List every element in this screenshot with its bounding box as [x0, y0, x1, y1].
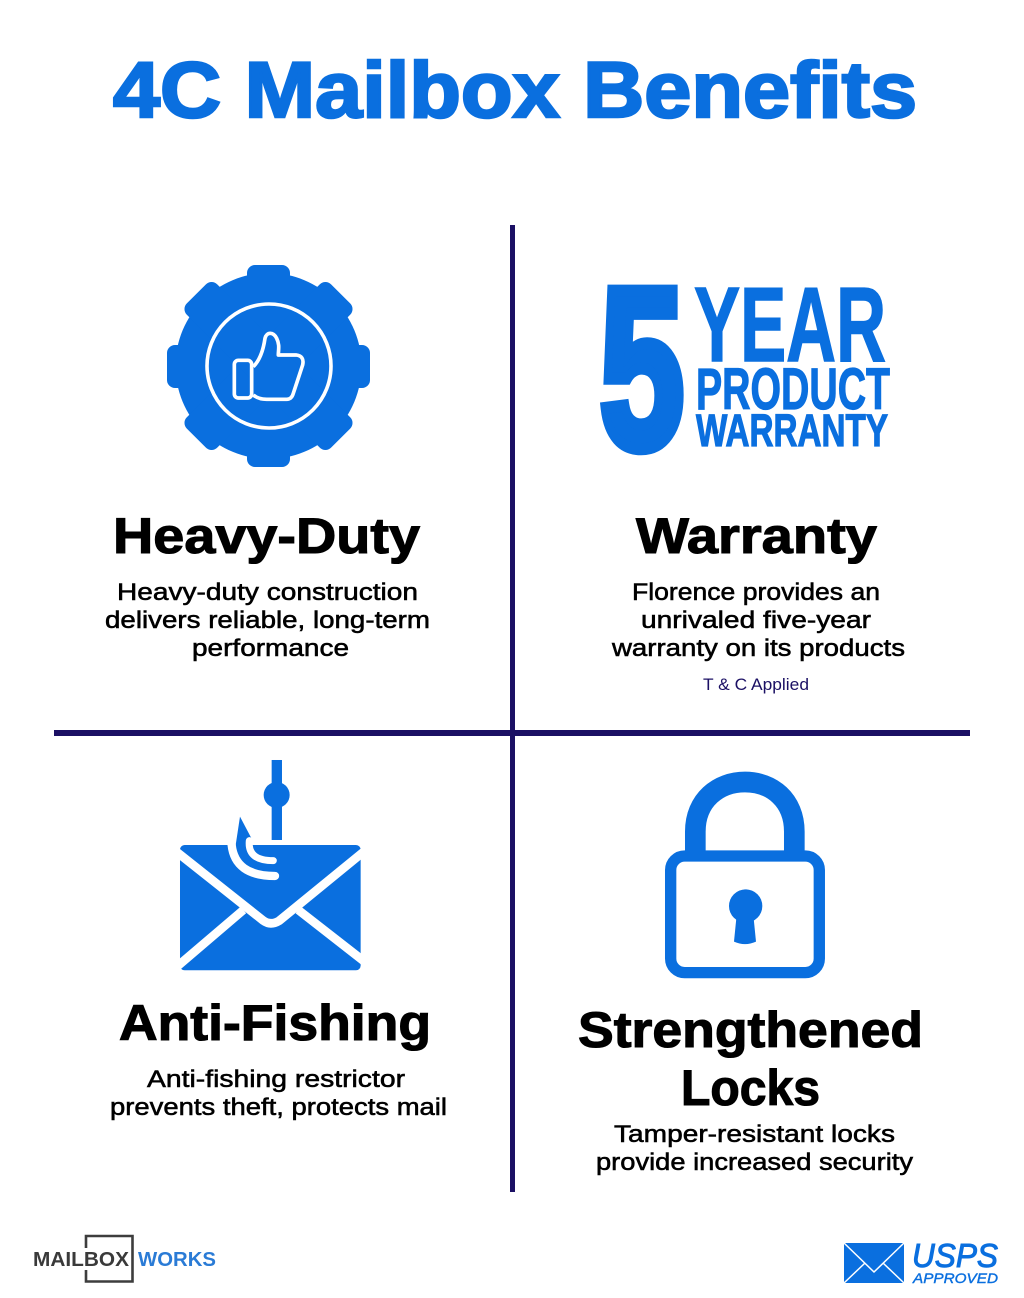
panel: warranty [600, 241, 905, 694]
panel: heavy-duty [105, 265, 430, 662]
logo: USPS Approved: USPS [912, 1237, 998, 1274]
body text: heavy-duty: delivers reliable, long-term [105, 607, 430, 634]
icon: 5 year product warranty badge: PRODUCT [696, 357, 890, 422]
icon: 5 year product warranty badge: YEAR [694, 266, 886, 384]
heading: Anti-Fishing: Anti-Fishing [119, 995, 431, 1051]
body text: heavy-duty [105, 579, 430, 662]
icon: padlock [671, 782, 819, 973]
grid divider: vertical [510, 225, 515, 1192]
logo: USPS Approved [844, 1237, 998, 1286]
body text: anti-fishing [110, 1066, 447, 1121]
heading: Strengthened Locks: Strengthened [578, 1002, 923, 1058]
icon: 5 year product warranty badge [600, 241, 890, 495]
logo: USPS Approved: APPROVED [912, 1270, 998, 1286]
heading: Heavy-Duty: Heavy-Duty [113, 508, 420, 564]
grid divider: horizontal [54, 730, 970, 736]
icon: 5 year product warranty badge: 5 [600, 241, 684, 495]
body text: warranty: Florence provides an [632, 579, 880, 606]
body text: heavy-duty: Heavy-duty construction [117, 579, 418, 606]
body text: warranty: unrivaled five-year [641, 607, 871, 634]
icon: envelope with fishing hook [173, 760, 367, 970]
body text: anti-fishing: prevents theft, protects mail [110, 1094, 447, 1121]
panel: anti-fishing [110, 760, 447, 1121]
heading: Strengthened Locks: Locks [681, 1060, 820, 1116]
logo: Mailbox Works: MAILBOX [33, 1249, 130, 1271]
note: terms and conditions: T & C Applied [703, 676, 809, 694]
icon: gear with thumbs up [167, 265, 370, 467]
body text: locks [596, 1121, 913, 1176]
logo: Mailbox Works [33, 1236, 216, 1282]
heading: Strengthened Locks [578, 1002, 923, 1116]
body text: anti-fishing: Anti-fishing restrictor [147, 1066, 405, 1093]
body text: warranty [611, 579, 905, 662]
body text: locks: Tamper-resistant locks [614, 1121, 895, 1148]
body text: warranty: warranty on its products [611, 635, 905, 662]
title: 4C Mailbox Benefits [113, 45, 917, 134]
body text: locks: provide increased security [596, 1149, 913, 1176]
panel: strengthened locks [578, 782, 923, 1176]
heading: Warranty: Warranty [636, 508, 877, 564]
icon: 5 year product warranty badge: WARRANTY [696, 405, 888, 456]
logo: Mailbox Works: WORKS [138, 1249, 216, 1271]
body text: heavy-duty: performance [192, 635, 349, 662]
